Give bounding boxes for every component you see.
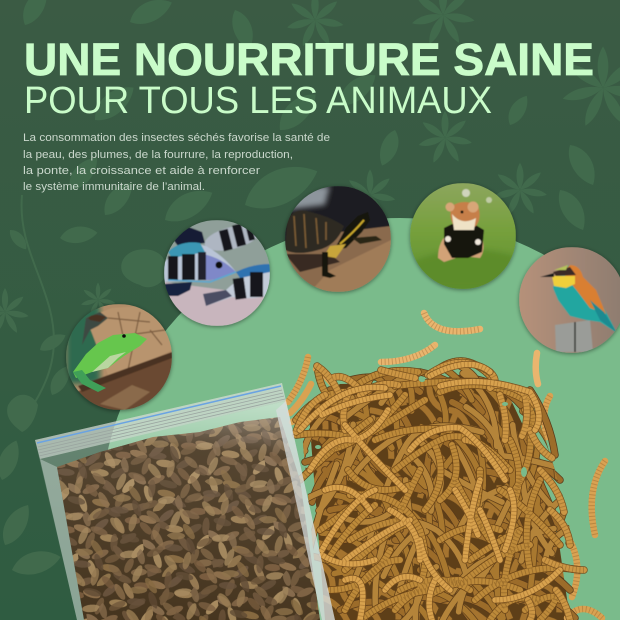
bag haze <box>40 401 335 620</box>
bird <box>553 265 617 333</box>
zip seal <box>35 383 286 459</box>
main fish <box>164 245 236 282</box>
back worms <box>300 372 575 618</box>
title line 1: UNE NOURRITURE SAINE <box>24 34 594 85</box>
photo: lizard <box>66 304 172 410</box>
pile of mealworms <box>284 310 608 620</box>
rotated back worms clipped to the pile <box>302 368 570 620</box>
intro paragraph: la ponte, la croissance et aide à renforcer <box>23 165 260 177</box>
intro paragraph: La consommation des insectes séchés favorise la santé de <box>23 132 330 144</box>
pile base <box>308 372 570 620</box>
front worms <box>300 364 560 620</box>
lizard <box>73 333 147 378</box>
loose worms around the pile <box>288 313 605 618</box>
head and neck <box>334 212 370 250</box>
lower fish <box>218 272 270 302</box>
resealable bag of dried insects <box>35 383 335 620</box>
bag body <box>35 383 335 620</box>
photo: hamster <box>410 183 516 289</box>
top fish <box>204 224 256 252</box>
green gaps in the pile <box>315 378 527 477</box>
shell <box>285 210 344 253</box>
intro paragraph: la peau, des plumes, de la fourrure, la reproduction, <box>23 149 293 161</box>
photo: bee-eater bird <box>519 247 620 353</box>
middle worms <box>296 361 580 620</box>
edge worms <box>296 363 584 620</box>
bag left edge <box>40 459 84 620</box>
title line 2: POUR TOUS LES ANIMAUX <box>24 80 492 122</box>
mint green half circle <box>100 218 620 620</box>
intro paragraph: le système immunitaire de l’animal. <box>23 181 205 193</box>
photo: turtle <box>285 186 391 292</box>
dried insects inside bag <box>57 417 320 620</box>
photo: fish <box>164 220 270 326</box>
bag right edge <box>276 401 335 620</box>
hamster body <box>437 238 484 263</box>
title <box>24 34 594 122</box>
intro paragraph <box>23 132 330 193</box>
post <box>555 320 593 352</box>
